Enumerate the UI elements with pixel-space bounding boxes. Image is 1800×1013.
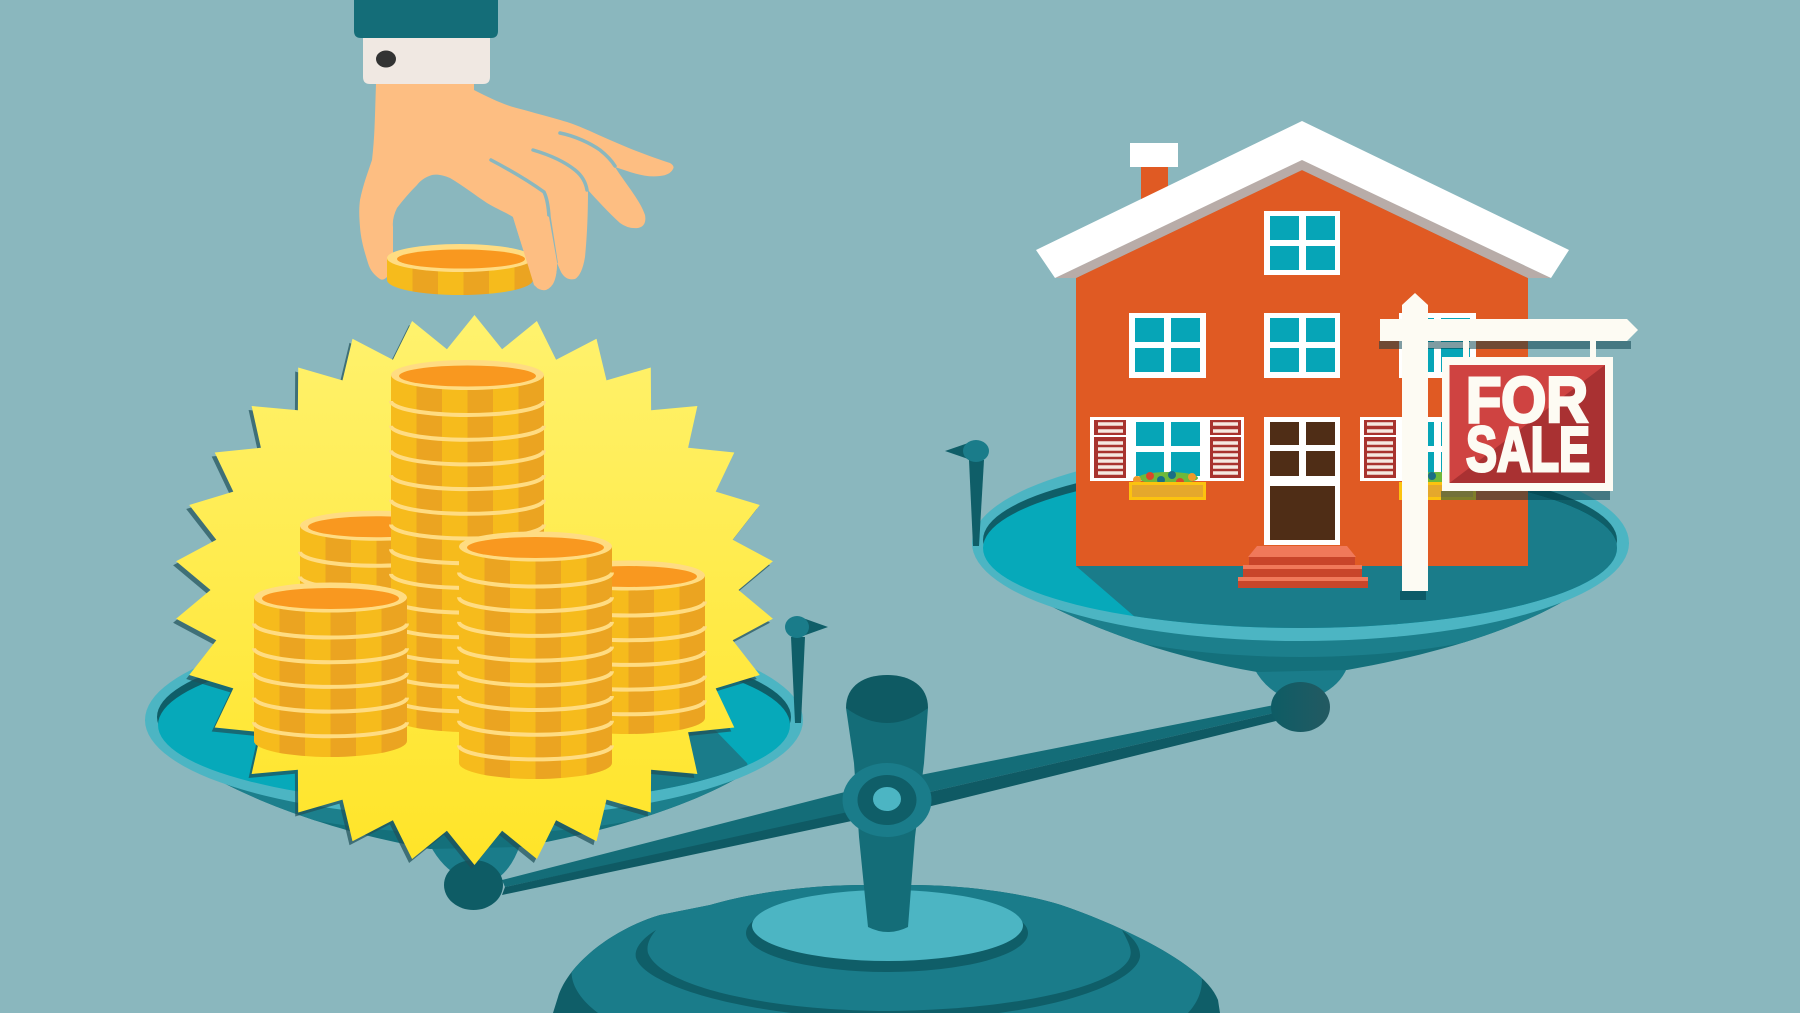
roof [1036, 121, 1569, 278]
coin stack: front left [254, 582, 407, 757]
left pan flag pin [785, 616, 828, 723]
coin stack: rear right [552, 560, 705, 734]
second floor left window [1129, 313, 1206, 378]
starburst behind coins [173, 315, 773, 869]
hand holding coin [354, 0, 674, 295]
scale post and pivot [842, 675, 932, 932]
coin stack: rear left [300, 511, 453, 662]
coin held in fingers [387, 244, 533, 295]
balance beam [444, 682, 1330, 910]
attic window [1264, 211, 1340, 275]
flower box right [1400, 472, 1474, 498]
shirt cuff [363, 38, 490, 84]
chimney [1130, 143, 1178, 200]
sleeve [354, 0, 498, 38]
coin stack: tall rear [391, 360, 544, 732]
front steps [1238, 546, 1368, 588]
second floor right window [1399, 313, 1476, 378]
flower box left [1130, 471, 1204, 498]
hand palm and fingers [359, 84, 674, 290]
sign text: SALE: SALE [1466, 415, 1590, 485]
index finger over coin [513, 205, 557, 290]
sign hangers [1463, 341, 1596, 358]
finger creases [491, 133, 615, 262]
ground floor left window with shutters [1090, 417, 1244, 481]
roof shadow [1055, 159, 1551, 278]
right pan flag pin [945, 440, 989, 546]
second floor centre window [1264, 313, 1340, 378]
scale base [553, 885, 1220, 1013]
sign shadows [1379, 341, 1631, 600]
for sale sign [1379, 293, 1638, 600]
ground floor right window with shutter [1360, 417, 1476, 481]
right pan [972, 472, 1629, 693]
cuff button [376, 50, 396, 68]
sign post [1402, 293, 1428, 591]
sign board [1442, 357, 1613, 491]
sign arm [1380, 319, 1638, 341]
left pan [145, 668, 803, 876]
house [1036, 121, 1569, 588]
sign text: FOR: FOR [1466, 364, 1588, 436]
coin stack: front right [459, 532, 612, 779]
wall [1076, 170, 1528, 566]
front door [1264, 417, 1340, 545]
